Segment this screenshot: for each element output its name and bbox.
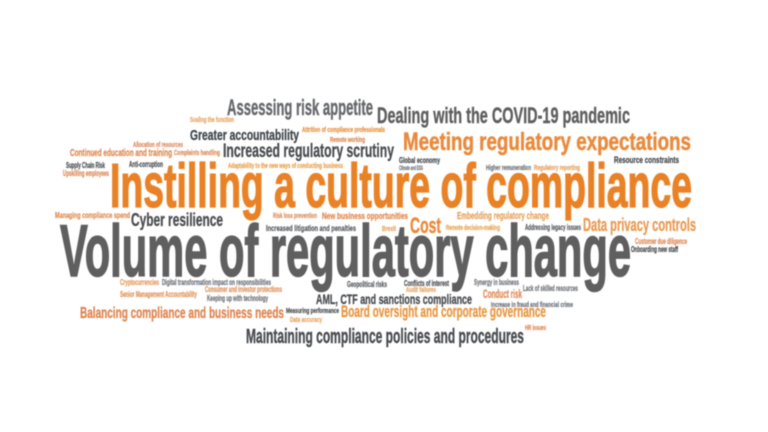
phrase: New business opportunities: New business opportunities (322, 211, 408, 222)
phrase: Conflicts of interest: Conflicts of interest (404, 279, 449, 288)
phrase: Dealing with the COVID-19 pandemic: Dealing with the COVID-19 pandemic (377, 103, 630, 128)
phrase: Cryptocurrencies: Cryptocurrencies (120, 278, 159, 287)
phrase: Addressing legacy issues: Addressing legacy issues (525, 223, 581, 232)
phrase: Increased litigation and penalties: Increased litigation and penalties (266, 223, 356, 233)
phrase: Attrition of compliance professionals: Attrition of compliance professionals (302, 127, 385, 134)
phrase: Synergy in business: Synergy in business (474, 278, 519, 287)
phrase: Assessing risk appetite: Assessing risk appetite (227, 95, 373, 120)
phrase: Customer due diligence: Customer due diligence (635, 237, 687, 246)
phrase: HR issues: HR issues (525, 325, 546, 332)
phrase: Geopolitical risks: Geopolitical risks (347, 280, 387, 289)
phrase: Increase in fraud and financial crime: Increase in fraud and financial crime (491, 302, 573, 309)
phrase: Higher remuneration: Higher remuneration (486, 165, 531, 172)
phrase: Audit failures: Audit failures (406, 287, 436, 294)
phrase: Board oversight and corporate governance: Board oversight and corporate governance (341, 302, 546, 321)
phrase: Cyber resilience: Cyber resilience (131, 210, 223, 230)
phrase: Measuring performance: Measuring performance (286, 306, 339, 315)
phrase: Anti-corruption: Anti-corruption (129, 160, 163, 169)
phrase: Adaptability to the new ways of conducting business: Adaptability to the new ways of conducting business (228, 163, 343, 170)
phrase: Allocation of resources: Allocation of resources (133, 142, 183, 149)
phrase: Balancing compliance and business needs: Balancing compliance and business needs (80, 305, 284, 322)
phrase: Conduct risk: Conduct risk (483, 289, 522, 301)
phrase: Global economy: Global economy (399, 155, 440, 165)
phrase: Cost: Cost (410, 213, 441, 238)
phrase: Data accuracy: Data accuracy (290, 315, 323, 324)
phrase: Embedding regulatory change: Embedding regulatory change (457, 210, 549, 222)
phrase: Increased regulatory scrutiny: Increased regulatory scrutiny (223, 141, 394, 162)
phrase: Senior Management Accountability: Senior Management Accountability (120, 290, 197, 299)
phrase: Managing compliance spend: Managing compliance spend (55, 211, 130, 220)
phrase: Scaling the function: Scaling the function (190, 117, 234, 124)
phrase: Regulatory reporting: Regulatory reporting (534, 165, 580, 172)
phrase: Onboarding new staff: Onboarding new staff (631, 245, 678, 254)
phrase: Continued education and training: Continued education and training (70, 147, 172, 159)
phrase: Upskilling employees: Upskilling employees (63, 169, 109, 178)
phrase: Consumer and investor protections: Consumer and investor protections (205, 285, 282, 294)
phrase: Resource constraints: Resource constraints (614, 155, 679, 166)
phrase: Brexit: Brexit (382, 226, 396, 233)
phrase: AML, CTF and sanctions compliance: AML, CTF and sanctions compliance (316, 291, 472, 307)
phrase: Complaints handling: Complaints handling (174, 150, 220, 157)
phrase: Digital transformation impact on responsibilities: Digital transformation impact on responsibilities (162, 278, 271, 287)
phrase: Keeping up with technology: Keeping up with technology (207, 294, 268, 303)
phrase: Lack of skilled resources: Lack of skilled resources (523, 284, 578, 293)
phrase: Data privacy controls: Data privacy controls (583, 215, 696, 235)
phrase: Maintaining compliance policies and procedures: Maintaining compliance policies and procedures (246, 326, 524, 348)
phrase: Greater accountability: Greater accountability (190, 127, 299, 144)
phrase: Remote working: Remote working (330, 137, 365, 144)
word cloud: Climate and ESG (399, 165, 423, 172)
phrase: Risk loss prevention: Risk loss prevention (273, 213, 317, 220)
phrase: Remote decision-making: Remote decision-making (446, 225, 500, 232)
phrase: Supply Chain Risk: Supply Chain Risk (66, 161, 105, 170)
